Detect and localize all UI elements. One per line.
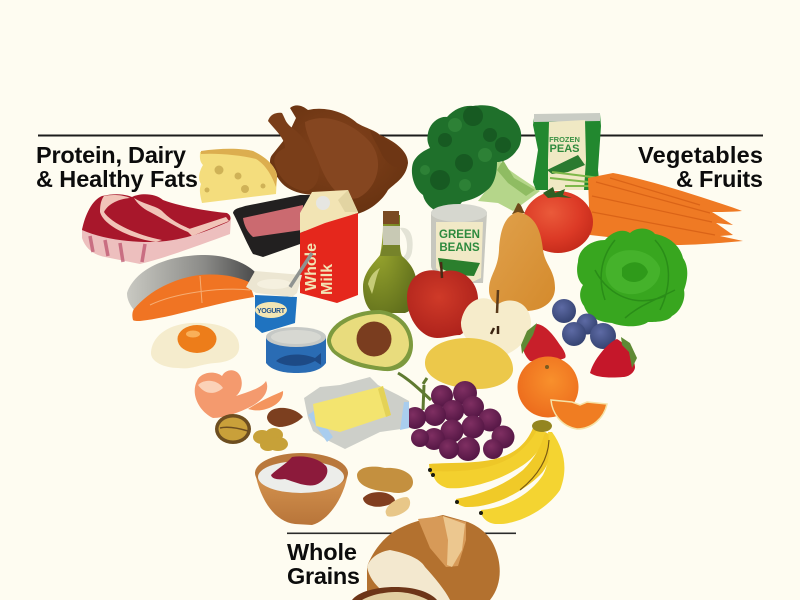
icon: steak bbox=[82, 194, 231, 264]
heading: protein, dairy and healthy fats: Protein, Dairy bbox=[36, 142, 186, 168]
icon: salmon fillet bbox=[127, 255, 255, 321]
icon: red apple bbox=[407, 262, 478, 338]
icon: carrots bbox=[550, 172, 743, 245]
top divider rule bbox=[38, 134, 763, 136]
heading: whole grains: Grains bbox=[287, 563, 360, 589]
icon: strawberry left bbox=[521, 323, 566, 361]
icon: peanut bbox=[357, 467, 413, 493]
icon: orange slice bbox=[551, 400, 607, 429]
icon: cheese wedge bbox=[199, 149, 277, 203]
icon: almond bbox=[267, 408, 303, 427]
icon: canned green beans: GREEN bbox=[439, 229, 480, 241]
icon: bread loaf bbox=[367, 515, 500, 600]
icon: bunch of grapes bbox=[398, 373, 514, 461]
icon: olive oil bottle bbox=[363, 211, 417, 313]
icon: walnut piece bbox=[253, 428, 288, 451]
icon: yogurt cup bbox=[246, 253, 312, 333]
heading: vegetables and fruits bbox=[638, 142, 763, 192]
icon: butter in wrapper bbox=[304, 377, 409, 449]
icon: orange bbox=[518, 356, 578, 418]
heading: vegetables and fruits: Vegetables bbox=[638, 142, 763, 168]
icon: broccoli bbox=[412, 105, 540, 214]
icon: shrimp bbox=[195, 370, 283, 418]
icon: butternut squash bbox=[489, 203, 555, 311]
icon: canned green beans bbox=[431, 204, 487, 283]
icon: tomato bbox=[523, 187, 593, 253]
heading: whole grains bbox=[287, 539, 360, 589]
bottom divider rule bbox=[287, 532, 516, 534]
icon: milk carton bbox=[300, 190, 358, 303]
icon: frozen peas bag: FROZEN bbox=[549, 135, 580, 144]
icon: milk carton: Milk bbox=[319, 264, 336, 295]
icon: avocado half bbox=[327, 310, 413, 371]
icon: strawberry right bbox=[590, 337, 637, 378]
icon: yogurt cup: YOGURT bbox=[257, 308, 286, 315]
heading: protein, dairy and healthy fats: & Healthy Fats bbox=[36, 166, 198, 192]
icon: frozen peas bag bbox=[533, 113, 601, 190]
icon: blueberries bbox=[552, 299, 616, 349]
icon: milk carton: Whole bbox=[303, 243, 320, 291]
heading: vegetables and fruits: & Fruits bbox=[676, 166, 763, 192]
icon: light almond bbox=[386, 497, 410, 517]
icon: roast chicken bbox=[268, 105, 408, 215]
icon: apple half bbox=[461, 290, 531, 358]
icon: potato bbox=[425, 338, 513, 389]
icon: ground meat tray bbox=[233, 195, 310, 257]
icon: dark almond bbox=[363, 492, 395, 507]
icon: bowl of oats bbox=[352, 587, 437, 600]
icon: bowl of grain with berries bbox=[255, 453, 348, 525]
icon: bananas bbox=[428, 420, 564, 524]
icon: butter lettuce bbox=[577, 229, 687, 326]
icon: frozen peas bag: PEAS bbox=[550, 143, 579, 155]
icon: fried egg bbox=[151, 323, 239, 368]
icon: walnut in shell bbox=[215, 414, 251, 444]
heading: whole grains: Whole bbox=[287, 539, 357, 565]
icon: tuna can bbox=[266, 327, 326, 373]
heading: protein, dairy and healthy fats bbox=[36, 142, 198, 192]
icon: canned green beans: BEANS bbox=[439, 242, 480, 254]
